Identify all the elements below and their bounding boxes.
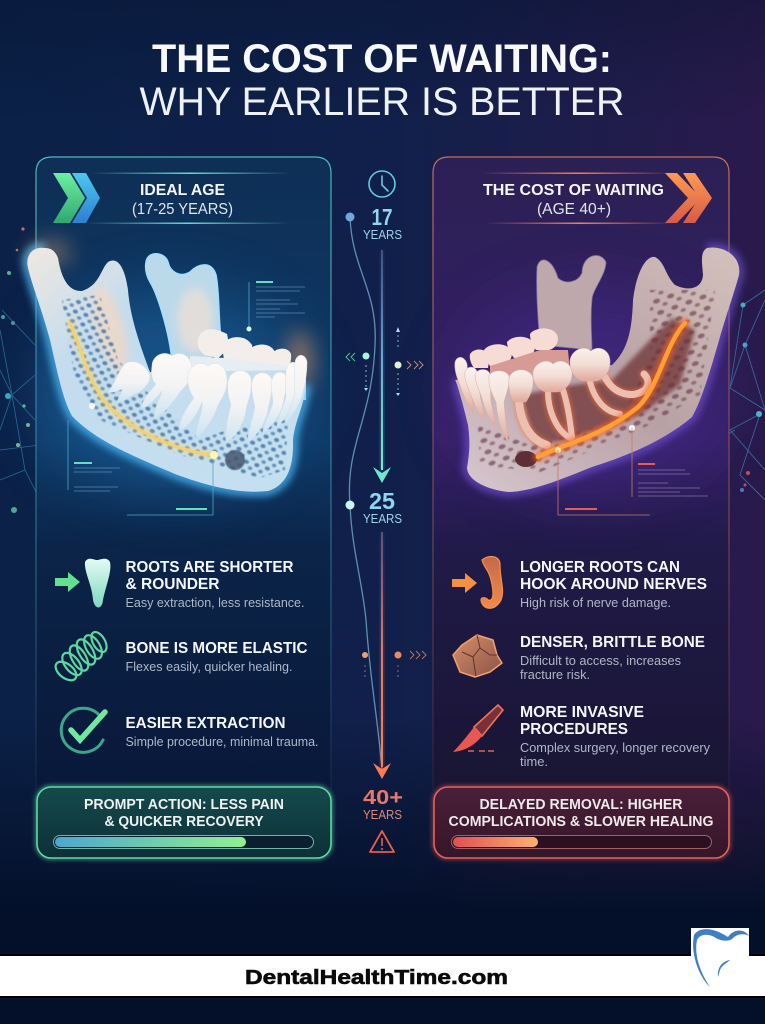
right header: (AGE 40+) xyxy=(537,201,611,218)
jaw bone xyxy=(27,248,306,492)
callout: prompt action: PROMPT ACTION: LESS PAIN xyxy=(84,797,284,813)
icon: scalpel xyxy=(453,705,503,752)
age label: 17 years xyxy=(363,204,402,242)
right risks xyxy=(452,557,711,769)
timeline dot: 25 xyxy=(346,500,354,510)
panel: ideal age xyxy=(36,157,331,790)
timeline dot: 17 xyxy=(346,212,354,222)
title: WHY EARLIER IS BETTER xyxy=(140,80,624,124)
item: invasive procedures: time. xyxy=(520,755,548,769)
item: brittle bone: fracture risk. xyxy=(520,668,590,682)
footer band: DentalHealthTime.com xyxy=(245,967,508,989)
curved path xyxy=(349,217,382,770)
marker: mid dots upper xyxy=(346,327,423,396)
item: brittle bone: Difficult to access, increases xyxy=(520,654,681,668)
left header xyxy=(53,172,290,224)
far ramus xyxy=(537,255,606,350)
jaw glow xyxy=(27,248,306,492)
callout: delayed removal: COMPLICATIONS & SLOWER HEALING xyxy=(448,814,714,830)
item: shorter roots xyxy=(55,559,304,610)
left benefits xyxy=(52,559,318,752)
item: longer roots: LONGER ROOTS CAN xyxy=(520,559,680,576)
gum filler xyxy=(190,356,306,400)
jaw bone xyxy=(455,247,739,492)
age label: 40+ years xyxy=(363,787,403,822)
icon: green and blue chevrons xyxy=(53,173,100,223)
item: longer roots xyxy=(452,557,707,610)
icon: arrow and hook root xyxy=(452,557,503,608)
marker: mid dots lower xyxy=(362,651,426,680)
arrow segment: 17 to 25 xyxy=(373,250,391,483)
item: elastic bone: BONE IS MORE ELASTIC xyxy=(126,640,308,657)
item: elastic bone xyxy=(52,629,308,684)
left header: IDEAL AGE xyxy=(140,182,225,199)
title xyxy=(140,37,624,124)
porous bone xyxy=(62,295,288,478)
callout: prompt action xyxy=(37,787,331,858)
progress bar xyxy=(54,836,314,848)
item: shorter roots: Easy extraction, less resistance. xyxy=(126,596,304,610)
icon: orange chevrons xyxy=(665,173,712,223)
item: invasive procedures xyxy=(453,704,711,769)
right header xyxy=(480,172,712,224)
icon: spring xyxy=(52,629,110,684)
icon: check circle xyxy=(61,708,105,752)
item: easier extraction xyxy=(61,708,318,752)
item: elastic bone: Flexes easily, quicker healing. xyxy=(126,660,292,674)
porous bone xyxy=(478,290,715,472)
item: invasive procedures: Complex surgery, longer recovery xyxy=(520,741,711,755)
front teeth xyxy=(455,348,610,442)
age label: 40+ years: YEARS xyxy=(363,808,402,822)
back teeth xyxy=(198,329,291,374)
nerve xyxy=(70,323,213,455)
item: invasive procedures: PROCEDURES xyxy=(520,721,628,738)
age label: 40+ years: 40+ xyxy=(363,787,403,809)
network decoration: left xyxy=(0,227,40,513)
long hooked roots xyxy=(519,374,648,445)
item: longer roots: HOOK AROUND NERVES xyxy=(520,576,707,593)
back teeth xyxy=(470,328,558,368)
item: longer roots: High risk of nerve damage. xyxy=(520,596,671,610)
item: easier extraction: Simple procedure, minimal trauma. xyxy=(126,735,318,749)
timeline xyxy=(346,171,426,852)
item: invasive procedures: MORE INVASIVE xyxy=(520,704,644,721)
icon: rock xyxy=(453,635,502,677)
item: shorter roots: & ROUNDER xyxy=(126,576,220,593)
jaw illustration: healthy young jaw xyxy=(27,239,314,492)
arrow segment: 25 to 40 xyxy=(373,532,391,779)
right jaw callouts xyxy=(558,428,708,515)
gum xyxy=(490,350,570,378)
front teeth xyxy=(108,353,307,442)
age label: 25 years: 25 xyxy=(369,488,395,514)
panel: cost of waiting xyxy=(433,157,729,790)
age label: 25 years: YEARS xyxy=(363,512,402,526)
age label: 17 years: YEARS xyxy=(363,228,402,242)
item: shorter roots: ROOTS ARE SHORTER xyxy=(126,559,294,576)
far ramus xyxy=(146,254,222,368)
title: THE COST OF WAITING: xyxy=(152,37,612,81)
icon: clock xyxy=(369,171,395,197)
left header: (17-25 YEARS) xyxy=(132,201,233,218)
item: easier extraction: EASIER EXTRACTION xyxy=(126,715,286,732)
callout: prompt action: & QUICKER RECOVERY xyxy=(104,814,264,830)
footer band xyxy=(0,954,765,998)
right header: THE COST OF WAITING xyxy=(483,182,664,199)
jaw illustration: older jaw xyxy=(455,247,739,492)
age label: 25 years xyxy=(363,488,402,526)
item: brittle bone xyxy=(453,634,705,682)
peach glow xyxy=(286,330,314,390)
age label: 17 years: 17 xyxy=(372,204,392,230)
logo: blue tooth xyxy=(691,928,749,987)
icon: arrow and tooth xyxy=(55,559,110,608)
network decoration: right xyxy=(700,290,765,500)
progress bar xyxy=(452,836,712,848)
jaw glow xyxy=(455,247,739,492)
icon: warning triangle xyxy=(370,831,394,852)
item: brittle bone: DENSER, BRITTLE BONE xyxy=(520,634,705,651)
callout: delayed removal xyxy=(434,787,729,858)
left jaw callouts xyxy=(68,281,305,515)
callout: delayed removal: DELAYED REMOVAL: HIGHER xyxy=(480,797,683,813)
nerve xyxy=(538,323,685,457)
